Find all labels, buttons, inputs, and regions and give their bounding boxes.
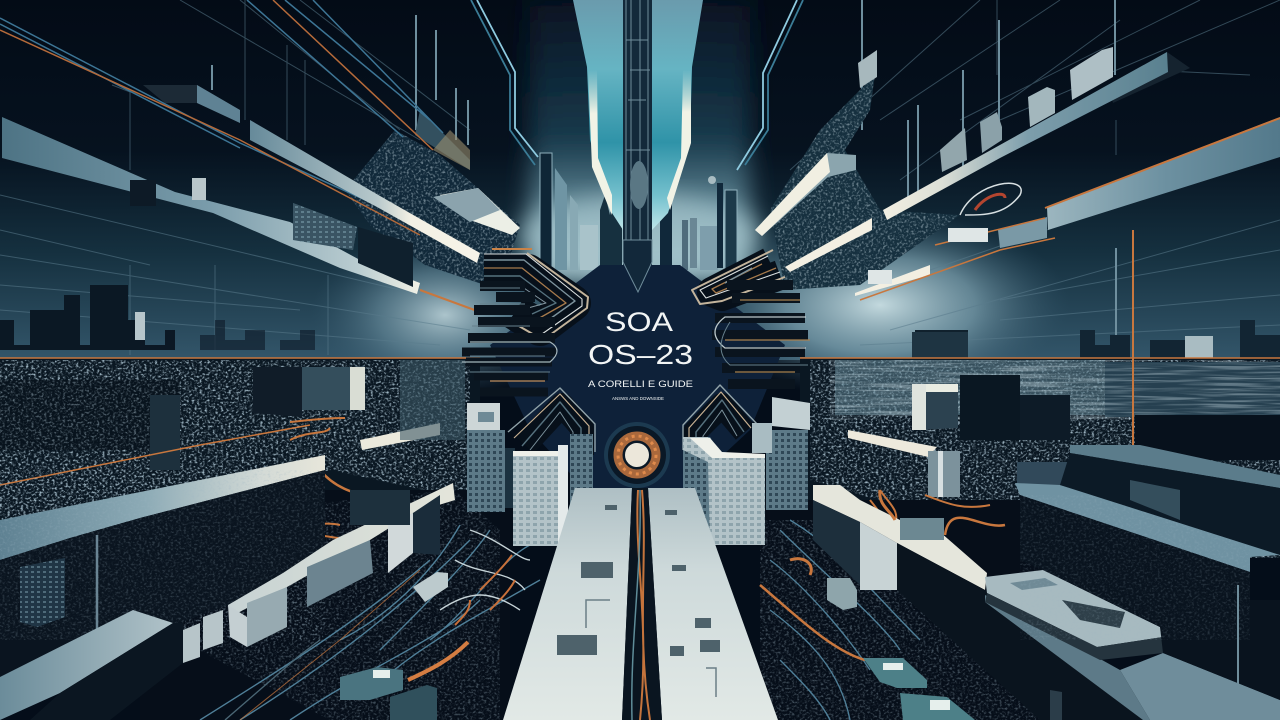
long edge xyxy=(897,543,1150,720)
central background glow and towers xyxy=(520,153,760,275)
shelf R1 xyxy=(1015,483,1280,572)
title line: SOA: SOA xyxy=(605,307,673,337)
left skyline xyxy=(0,285,315,350)
shelf 2 xyxy=(250,120,480,263)
left wire lines xyxy=(0,0,480,312)
floor xyxy=(1120,653,1280,720)
centre right towers xyxy=(683,397,810,545)
subtitle: A CORELLI E GUIDE xyxy=(588,379,693,389)
top box xyxy=(143,85,240,123)
upper right structures xyxy=(770,78,960,290)
lower roads xyxy=(503,488,778,720)
shelf R2 xyxy=(1070,445,1280,488)
building xyxy=(20,558,65,627)
wire field left xyxy=(140,470,540,720)
orbit wires xyxy=(860,183,1055,300)
floor D xyxy=(0,610,173,720)
teal modules xyxy=(340,667,403,700)
horizontal circuit bars left xyxy=(462,286,557,392)
underside shelf xyxy=(440,188,520,235)
small box xyxy=(413,572,448,602)
left column xyxy=(573,0,623,230)
core ring xyxy=(604,422,670,488)
lower right shelves xyxy=(813,445,1280,720)
small caption: ANSWS AND DOWNSIDE xyxy=(612,396,664,401)
blue neon struts xyxy=(471,0,803,170)
big right shelf xyxy=(1047,117,1280,230)
cylinder building xyxy=(912,384,958,430)
centre left towers xyxy=(467,403,593,546)
road modules xyxy=(557,505,720,697)
circuit bundle lower right xyxy=(683,385,757,450)
central teal light columns xyxy=(573,0,703,270)
shelf C xyxy=(228,483,455,617)
platform xyxy=(985,570,1163,647)
circuit bundle upper right xyxy=(692,250,785,304)
upper left structures xyxy=(347,110,520,284)
posts xyxy=(212,0,1116,360)
central dark disc xyxy=(490,265,785,495)
right road xyxy=(648,488,778,720)
lower left shelves xyxy=(0,455,455,720)
shelf 1 xyxy=(2,117,420,294)
main upper shelf xyxy=(1110,52,1190,103)
main ledge surface xyxy=(813,485,987,590)
perspective lines xyxy=(0,0,1280,450)
right column xyxy=(652,0,703,230)
mid left city xyxy=(0,358,480,563)
shelf A xyxy=(0,455,325,560)
mid right city xyxy=(800,332,1280,558)
teal modules xyxy=(863,658,927,688)
circuit bundle upper left xyxy=(484,249,588,340)
horizontal circuit bars right xyxy=(712,285,810,384)
circuit bundle lower left xyxy=(508,388,595,455)
texture boxes xyxy=(293,203,357,250)
left shelves xyxy=(2,85,520,294)
boxes xyxy=(1070,47,1113,100)
orange horizon line xyxy=(0,230,1280,450)
right skyline xyxy=(912,320,1280,358)
right shelves xyxy=(755,47,1280,300)
small box xyxy=(827,578,857,610)
wire field right xyxy=(760,490,1060,720)
title line: OS-23: OS–23 xyxy=(588,339,693,370)
centre spire base xyxy=(623,240,652,292)
cable channel xyxy=(622,488,662,720)
title xyxy=(588,307,693,401)
left road xyxy=(503,488,632,720)
